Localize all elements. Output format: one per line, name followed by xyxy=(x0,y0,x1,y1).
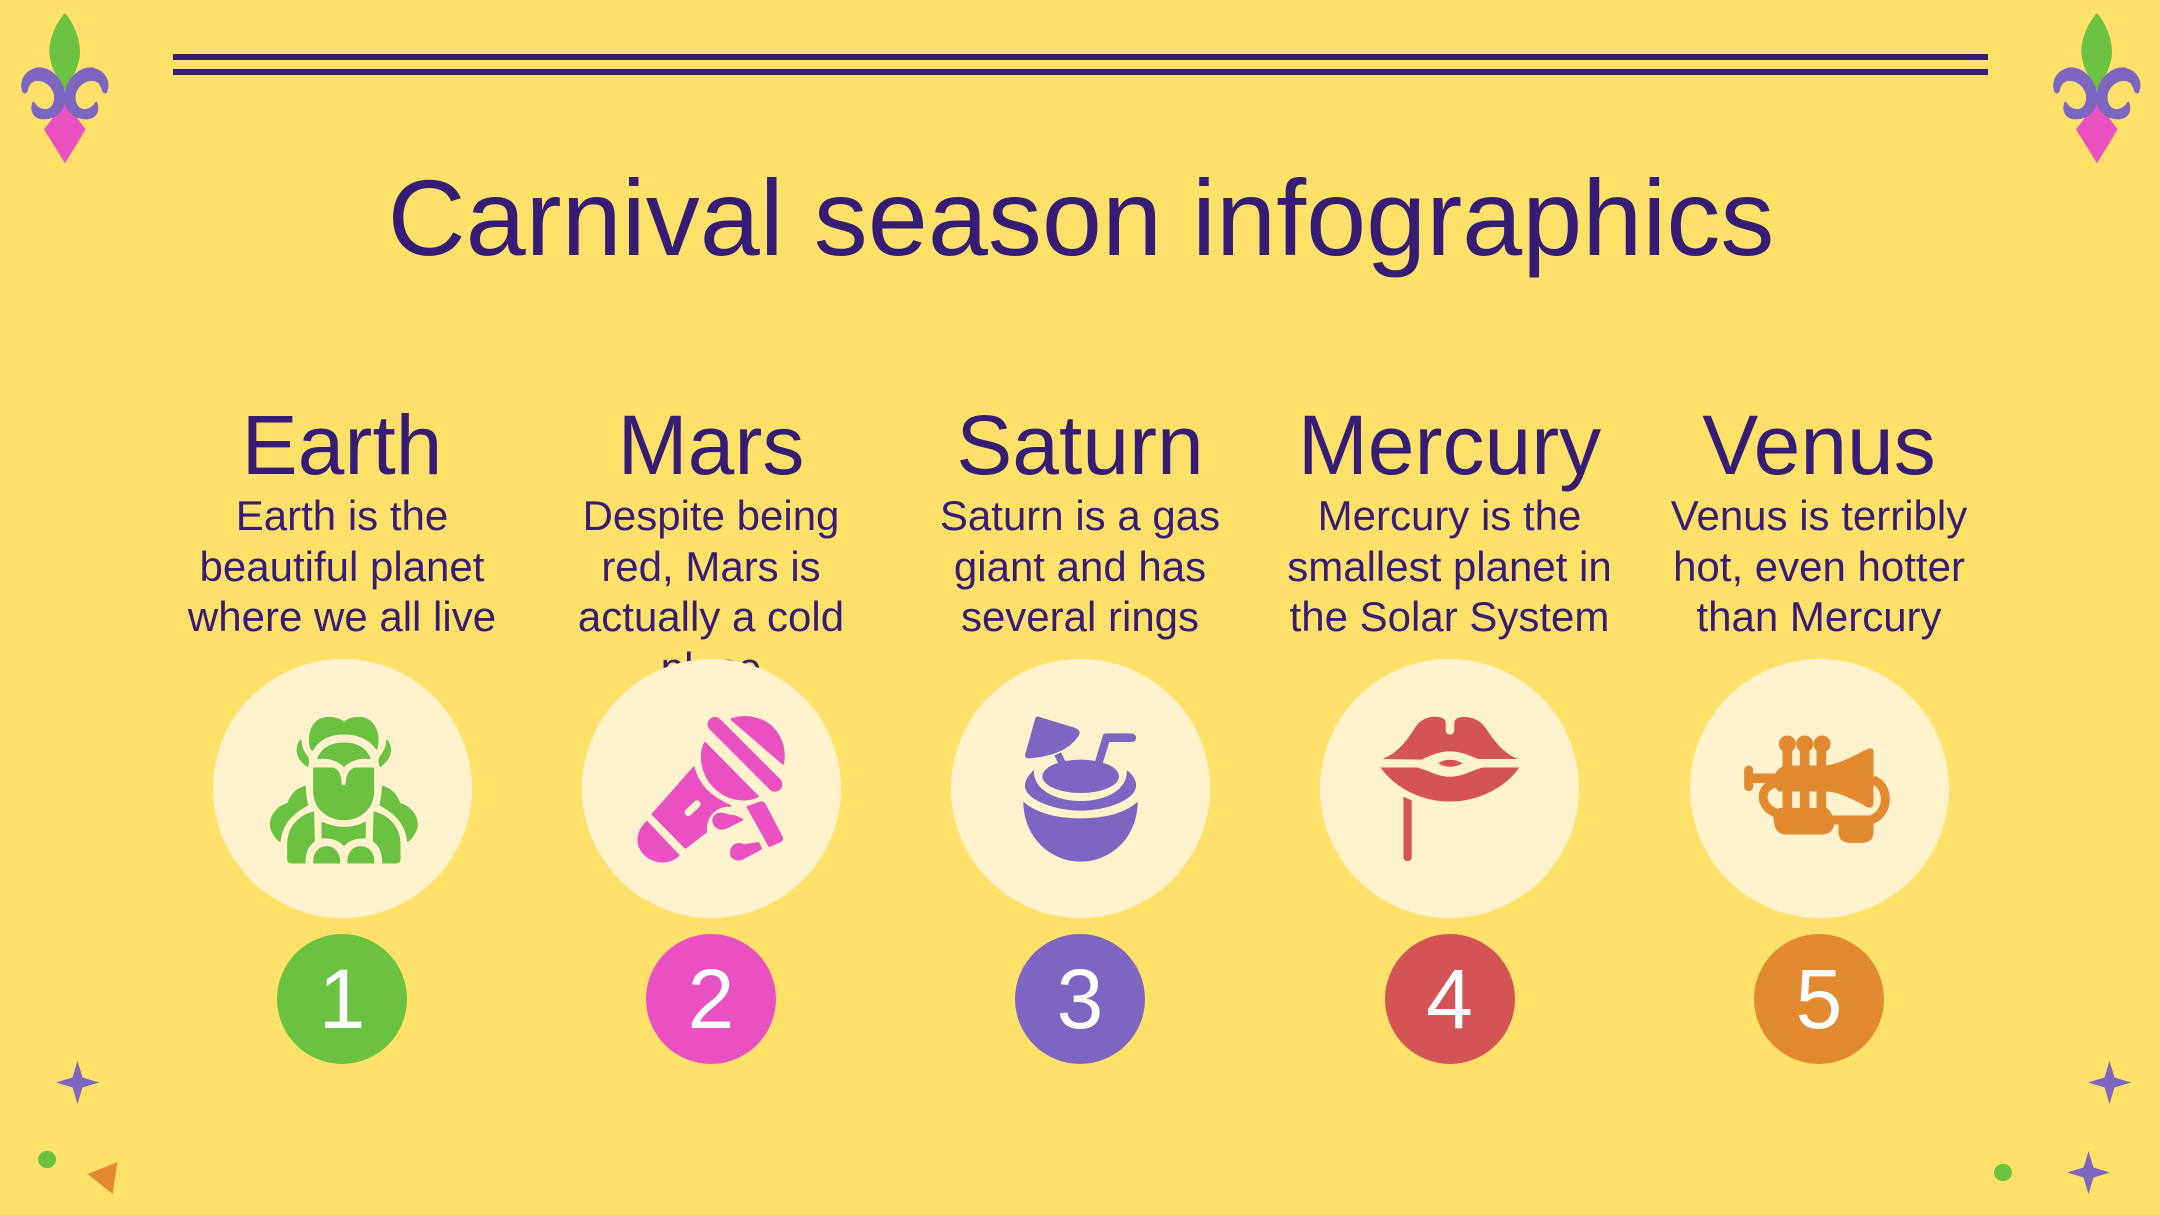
text: Mercury description: the Solar System xyxy=(1290,593,1609,640)
icon: sparkle bottom right upper xyxy=(2088,1061,2131,1104)
text: Mars description: place xyxy=(661,644,761,691)
panel: Mars xyxy=(578,398,844,1064)
number badge 1 xyxy=(277,934,407,1064)
top double rule xyxy=(173,54,1988,75)
text: Saturn description: giant and has xyxy=(954,543,1206,590)
icon: fleur-de-lis left xyxy=(21,13,108,164)
text: Earth description xyxy=(188,492,496,640)
number badge 4: 4 xyxy=(1426,952,1473,1046)
text: Saturn description: Saturn is a gas xyxy=(940,492,1220,539)
heading: Mars: Mars xyxy=(618,398,804,492)
text: Mars description xyxy=(578,492,844,691)
number badge 4 xyxy=(1384,934,1514,1064)
icon: fleur-de-lis right xyxy=(2053,13,2140,164)
text: Saturn description xyxy=(940,492,1220,640)
text: Venus description: hot, even hotter xyxy=(1673,543,1965,590)
number badge 2: 2 xyxy=(688,952,734,1046)
text: Venus description: Venus is terribly xyxy=(1671,492,1967,539)
text: Mars description: actually a cold xyxy=(578,593,844,640)
number badge 1: 1 xyxy=(319,952,365,1046)
icon: microphone xyxy=(638,716,785,862)
icon: green dot bottom left xyxy=(38,1151,56,1168)
panel: Mercury xyxy=(1287,398,1612,1064)
icon: trumpet xyxy=(1744,736,1890,843)
icon circle: Mercury xyxy=(1320,659,1579,918)
text: Earth description: where we all live xyxy=(188,593,496,640)
heading: Venus: Venus xyxy=(1702,398,1936,492)
number badge 3: 3 xyxy=(1057,952,1103,1046)
panel: Saturn xyxy=(940,398,1220,1064)
icon: lips on a stick xyxy=(1380,716,1520,861)
icon: carnival performer xyxy=(270,716,418,864)
icon: sparkle bottom left xyxy=(56,1061,99,1104)
text: Earth description: beautiful planet xyxy=(200,543,484,590)
text: Earth description: Earth is the xyxy=(236,492,448,539)
panel: Earth xyxy=(188,398,496,1064)
text: Venus description xyxy=(1671,492,1968,640)
text: Venus description: than Mercury xyxy=(1696,593,1942,640)
icon: orange triangle xyxy=(88,1162,118,1194)
text: Mercury description: smallest planet in xyxy=(1287,543,1612,590)
panel: Venus xyxy=(1671,398,1968,1064)
icon: sparkle bottom right lower xyxy=(2067,1151,2110,1194)
icon circle: Mars xyxy=(582,659,840,918)
icon: green dot bottom right xyxy=(1994,1164,2012,1181)
number badge 2 xyxy=(646,934,776,1064)
text: Saturn description: several rings xyxy=(961,593,1199,640)
text: Mercury description xyxy=(1287,492,1612,640)
icon circle: Saturn xyxy=(950,659,1210,918)
icon circle: Earth xyxy=(212,659,472,918)
number badge 3 xyxy=(1015,934,1145,1064)
number badge 5 xyxy=(1754,934,1884,1064)
number badge 5: 5 xyxy=(1796,952,1842,1046)
text: Mars description: Despite being xyxy=(583,492,839,539)
heading: Saturn: Saturn xyxy=(956,398,1204,492)
title: Carnival season infographics xyxy=(388,157,1774,278)
text: Mercury description: Mercury is the xyxy=(1318,492,1581,539)
icon: coconut drink xyxy=(1023,716,1138,862)
heading: Mercury: Mercury xyxy=(1298,398,1601,492)
icon circle: Venus xyxy=(1690,659,1948,918)
heading: Earth: Earth xyxy=(242,398,442,492)
text: Mars description: red, Mars is xyxy=(601,543,821,590)
